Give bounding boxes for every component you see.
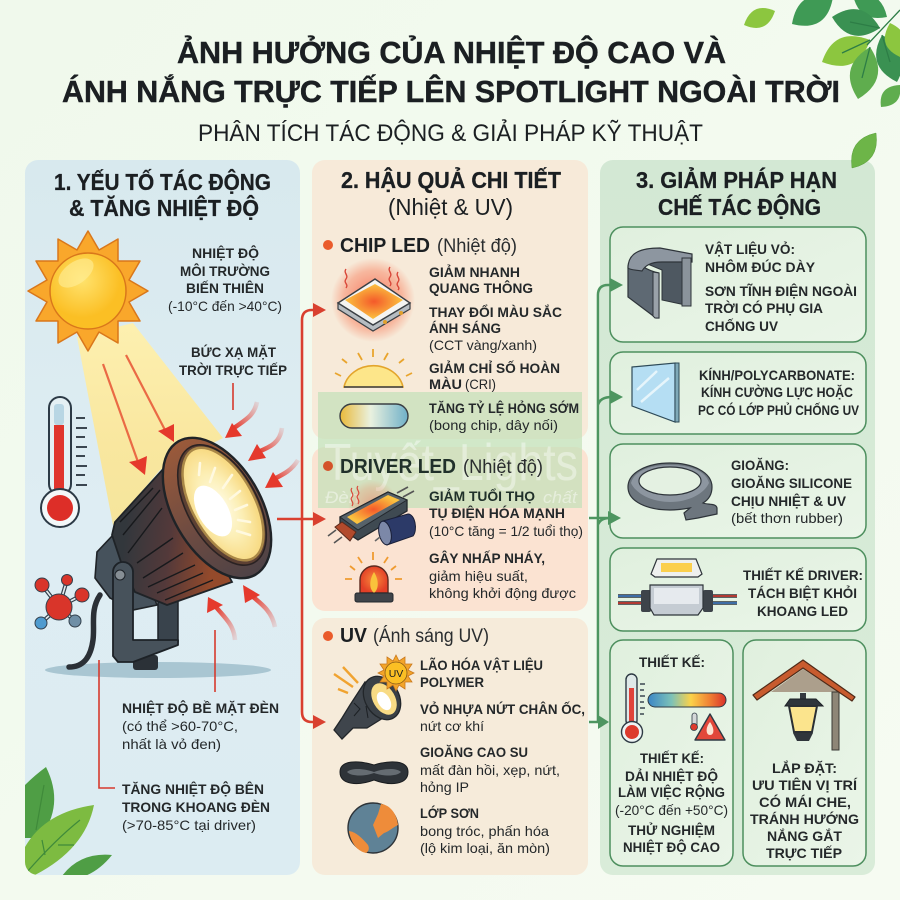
text: chip lumen drop: QUANG THÔNG (429, 279, 533, 296)
section: driver LED heading: (Nhiệt độ) (463, 457, 543, 478)
card: gasket (610, 444, 866, 538)
text: ambient temperature: (-10°C đến >40°C) (168, 298, 282, 314)
text: wide temperature range: THIẾT KẾ: (640, 750, 704, 766)
icon: separated LED and driver (618, 559, 737, 615)
icon: UV aged lamp: UV (389, 668, 403, 680)
sun beam (77, 323, 223, 525)
text: internal temperature: TRONG KHOANG ĐÈN (122, 799, 270, 815)
text: ambient temperature: NHIỆT ĐỘ (192, 244, 259, 261)
text: rubber seal (420, 744, 560, 795)
text: rubber seal: GIOĂNG CAO SU (420, 744, 528, 760)
arrows: green connectors to solutions (589, 278, 623, 729)
heading: consequences (341, 165, 561, 220)
text: housing material: CHỐNG UV (705, 317, 779, 334)
icon: leaves (25, 767, 112, 876)
text: wide temperature range: DẢI NHIỆT ĐỘ (625, 767, 718, 784)
text: glass (698, 367, 860, 418)
lamp rear bracket (135, 600, 178, 660)
decorative leaves: top right corner (744, 0, 900, 107)
icon: UV aged lamp (334, 655, 414, 739)
text: driver design: TÁCH BIỆT KHỎI (748, 584, 857, 601)
text: polymer aging: LÃO HÓA VẬT LIỆU (420, 656, 543, 673)
text: internal temperature (122, 780, 270, 833)
text: capacitor life: GIẢM TUỔI THỌ (429, 487, 535, 504)
card: driver design (610, 548, 866, 631)
text: internal temperature: TĂNG NHIỆT ĐỘ BÊN (122, 780, 264, 797)
text: flicker: không khởi động được (429, 585, 576, 601)
icon: degraded seal (340, 762, 408, 784)
section: driver LED heading (323, 456, 543, 478)
text: flicker (429, 549, 576, 601)
icon: colour capsule (340, 404, 408, 428)
icon: half sun (335, 349, 412, 387)
section: driver LED heading: DRIVER LED (340, 456, 456, 478)
text: installation: LẮP ĐẶT: (772, 759, 837, 776)
panel: factors (25, 160, 300, 876)
lamp front arm (113, 562, 178, 662)
icon: aluminium channel (628, 248, 692, 318)
text: polymer aging (420, 656, 543, 690)
text: rubber seal: mất đàn hồi, xẹp, nứt, (420, 762, 560, 778)
arrows: heat from above (225, 402, 298, 488)
text: direct solar radiation (179, 343, 287, 378)
section: chip LED heading (323, 235, 517, 257)
text: surface temperature: (có thể >60-70°C, (122, 718, 238, 734)
text: wide temperature range: NHIỆT ĐỘ CAO (623, 838, 720, 855)
title (62, 34, 840, 109)
text: surface temperature (122, 699, 279, 752)
text: housing material: NHÔM ĐÚC DÀY (705, 258, 816, 275)
title: ẢNH HƯỞNG CỦA NHIỆT ĐỘ CAO VÀ (177, 34, 726, 70)
icon: molecule (35, 574, 89, 629)
text: internal temperature: (>70-85°C tại driver) (122, 817, 256, 833)
text: installation: TRÁNH HƯỚNG (750, 810, 859, 827)
icon: sun (28, 231, 148, 351)
heading: factors: 1. YẾU TỐ TÁC ĐỘNG (54, 168, 271, 195)
text: early failure: TĂNG TỶ LỆ HỎNG SỚM (429, 399, 579, 416)
text: housing cracks: nứt cơ khí (420, 718, 484, 734)
icon: alarm light (345, 552, 402, 602)
text: gasket: GIOĂNG: (731, 457, 789, 473)
text: direct solar radiation: BỨC XẠ MẶT (191, 343, 276, 360)
icon: hot driver (328, 480, 415, 546)
icon: glass pane (632, 363, 679, 422)
text: installation: ƯU TIÊN VỊ TRÍ (752, 776, 858, 793)
text: capacitor life: TỤ ĐIỆN HÓA MẠNH (429, 504, 565, 521)
lamp rear housing (95, 535, 157, 610)
panel: chip LED (312, 160, 588, 439)
label: design: THIẾT KẾ: (639, 654, 705, 670)
text: chip lumen drop (429, 264, 533, 296)
heading: factors: & TĂNG NHIỆT ĐỘ (69, 194, 259, 221)
section: UV heading: (Ánh sáng UV) (373, 626, 489, 647)
card: glass (610, 352, 866, 434)
text: colour shift: (CCT vàng/xanh) (429, 337, 537, 353)
section: UV heading: UV (340, 625, 368, 647)
text: installation (750, 759, 859, 861)
text: driver design: THIẾT KẾ DRIVER: (743, 567, 863, 583)
text: gasket: CHỊU NHIỆT & UV (731, 492, 847, 509)
panel: UV (312, 618, 588, 875)
text: installation: NẮNG GẮT (767, 827, 842, 844)
text: ambient temperature (168, 244, 282, 314)
heading: consequences: 2. HẬU QUẢ CHI TIẾT (341, 165, 561, 193)
heading: solutions: 3. GIẢM PHÁP HẠN (636, 165, 837, 193)
leader lines (99, 383, 233, 788)
text: glass: KÍNH CƯỜNG LỰC HOẶC (701, 383, 853, 400)
lamp lens (166, 435, 280, 573)
watermark: Tuyết_Lights (324, 434, 578, 492)
text: driver design: KHOANG LED (757, 603, 848, 619)
text: housing material: VẬT LIỆU VỎ: (705, 240, 795, 257)
card: installation (743, 640, 866, 866)
text: paint coat: (lộ kim loại, ăn mòn) (420, 840, 550, 856)
text: surface temperature: NHIỆT ĐỘ BỀ MẶT ĐÈN (122, 699, 279, 716)
title: ÁNH NẮNG TRỰC TIẾP LÊN SPOTLIGHT NGOÀI TRỜI (62, 73, 840, 109)
text: installation: TRỰC TIẾP (766, 845, 842, 861)
text: capacitor life: (10°C tăng = 1/2 tuổi thọ) (429, 523, 583, 539)
icon: hot LED chip (331, 258, 415, 342)
text: glass: KÍNH/POLYCARBONATE: (699, 367, 855, 383)
text: housing material (705, 240, 857, 334)
text: housing cracks: VỎ NHỰA NỨT CHÂN ỐC, (420, 700, 585, 717)
icon: thermometer (41, 397, 87, 527)
text: surface temperature: nhất là vỏ đen) (122, 736, 221, 752)
text: early failure: (bong chip, dây nối) (429, 417, 558, 433)
heading: solutions: CHẾ TÁC ĐỘNG (658, 193, 821, 220)
panel: solutions (600, 160, 875, 875)
panel: driver LED (312, 447, 588, 611)
lamp base bolt (133, 642, 158, 670)
icon: peeling paint sphere (348, 803, 398, 853)
section: chip LED heading: CHIP LED (340, 235, 430, 257)
text: paint coat: LỚP SƠN (420, 804, 479, 821)
text: housing material: TRỜI CÓ PHỤ GIA (705, 299, 823, 316)
icon: lantern under roof (753, 660, 855, 750)
arrows: heat from below (207, 585, 275, 640)
section: UV heading (323, 625, 489, 647)
text: flicker: GÂY NHẤP NHÁY, (429, 549, 545, 566)
icon: spotlight (69, 419, 294, 670)
text: CRI drop: GIẢM CHỈ SỐ HOÀN (429, 359, 560, 376)
text: capacitor life (429, 487, 583, 539)
text: colour shift (429, 303, 562, 353)
text: colour shift: ÁNH SÁNG (429, 320, 501, 336)
text: rubber seal: hỏng IP (420, 779, 469, 795)
text: wide temperature range: (-20°C đến +50°C) (615, 802, 728, 818)
arrows: red connectors to consequences (277, 303, 326, 729)
text: flicker: giảm hiệu suất, (429, 568, 528, 584)
lamp body (112, 467, 232, 605)
card: housing material (610, 227, 866, 342)
heading: solutions (636, 165, 837, 220)
text: paint coat (420, 804, 550, 856)
arrows: sunlight (103, 355, 174, 475)
text: direct solar radiation: TRỜI TRỰC TIẾP (179, 361, 287, 378)
text: gasket (731, 457, 852, 526)
text: gasket: GIOĂNG SILICONE (731, 475, 852, 491)
text: colour shift: THAY ĐỔI MÀU SẮC (429, 303, 562, 320)
heading: consequences: (Nhiệt & UV) (388, 194, 513, 220)
icon: thermometer and range (622, 674, 726, 742)
text: installation: CÓ MÁI CHE, (759, 793, 851, 810)
heading: factors (54, 168, 271, 221)
text: glass: PC CÓ LỚP PHỦ CHỐNG UV (698, 401, 860, 418)
lamp rim (140, 419, 294, 597)
text: early failure (429, 399, 579, 433)
watermark: chất (543, 488, 578, 507)
text: chip lumen drop: GIẢM NHANH (429, 264, 520, 280)
subtitle: PHÂN TÍCH TÁC ĐỘNG & GIẢI PHÁP KỸ THUẬT (198, 118, 703, 147)
text: driver design (743, 567, 863, 619)
text: housing cracks (420, 700, 585, 734)
text: paint coat: bong tróc, phấn hóa (420, 823, 549, 839)
decorative leaf: on solutions panel corner (852, 133, 876, 168)
watermark: Đèn (325, 488, 359, 507)
text: CRI drop (429, 359, 560, 392)
lamp cable (69, 595, 100, 667)
text: CRI drop: MÀU (429, 376, 462, 392)
watermark (318, 392, 582, 508)
icon: silicone ring (628, 463, 717, 520)
text: housing material: SƠN TĨNH ĐIỆN NGOÀI (705, 282, 857, 299)
text: polymer aging: POLYMER (420, 674, 484, 690)
text: wide temperature range (615, 750, 728, 855)
text: wide temperature range: LÀM VIỆC RỘNG (618, 783, 725, 800)
ground shadow (45, 662, 271, 678)
section: chip LED heading: (Nhiệt độ) (437, 236, 517, 257)
text: ambient temperature: MÔI TRƯỜNG (180, 262, 270, 279)
text: gasket: (bết thơn rubber) (731, 510, 843, 526)
text: ambient temperature: BIẾN THIÊN (186, 279, 264, 296)
text: wide temperature range: THỬ NGHIỆM (628, 821, 715, 838)
card: wide temperature range (610, 640, 733, 866)
text: CRI drop: (CRI) (465, 376, 496, 392)
